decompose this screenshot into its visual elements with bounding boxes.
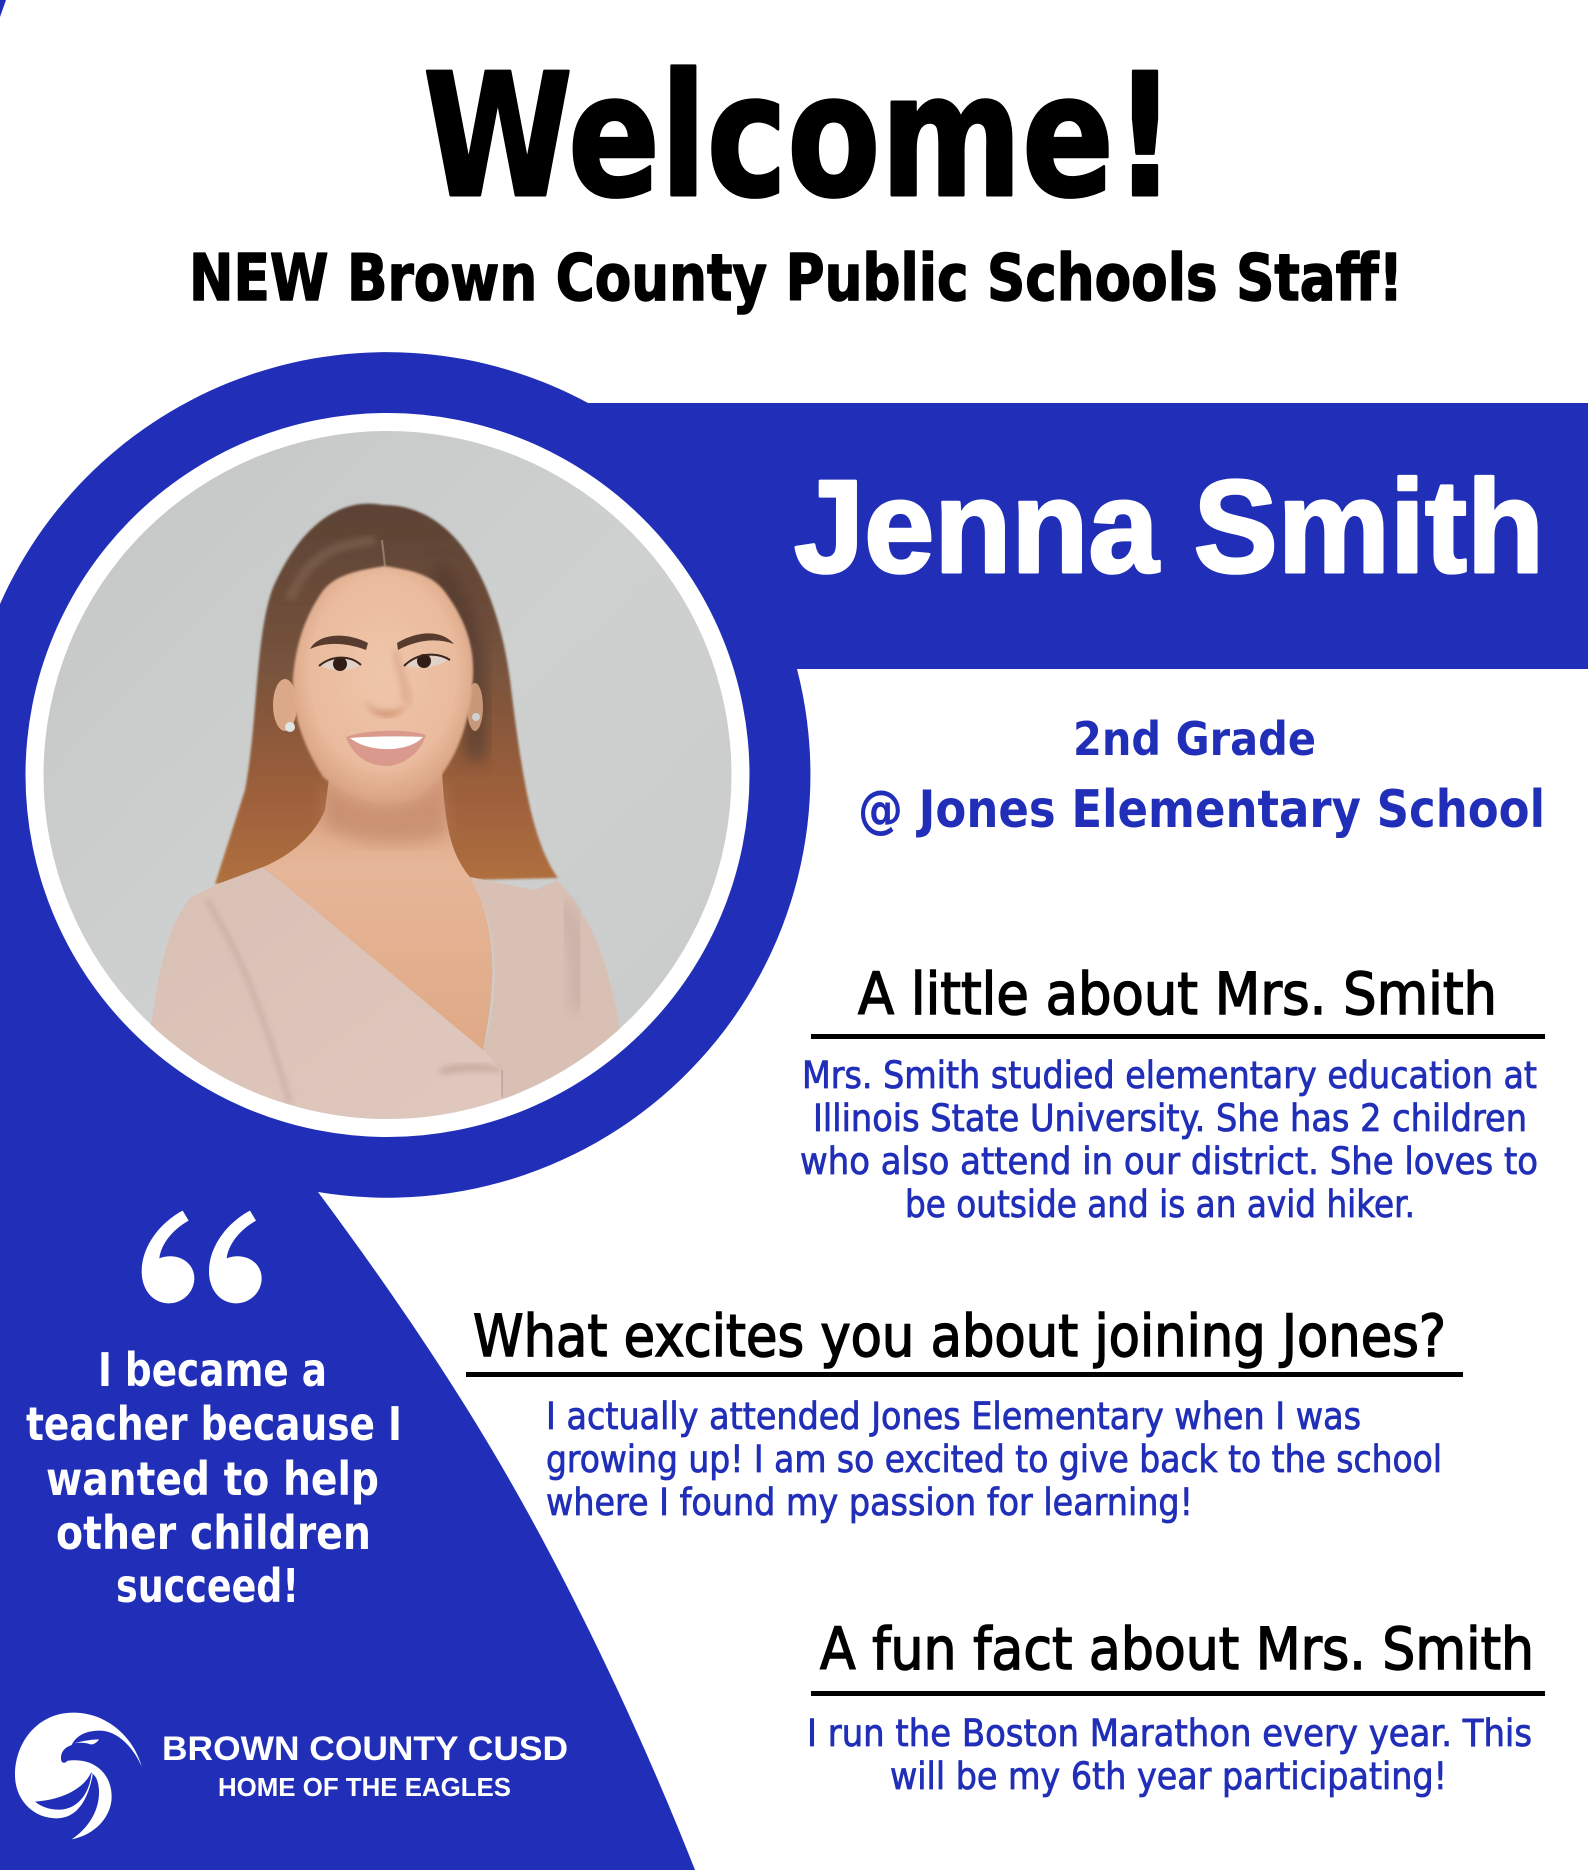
fun fact text: will be my 6th year participating! [890, 1755, 1447, 1798]
ears and earrings [273, 679, 297, 731]
photo [40, 430, 740, 1130]
about divider [811, 1034, 1545, 1039]
portrait photo [26, 413, 750, 1137]
blouse folds [207, 900, 290, 1103]
fun fact text [807, 1712, 1532, 1798]
quote text: other children [56, 1506, 371, 1560]
eyes [321, 659, 360, 670]
logo text: BROWN COUNTY CUSD [162, 1730, 568, 1768]
quote text: succeed! [116, 1559, 299, 1613]
hair parting [382, 540, 385, 566]
name banner text: Jenna Smith [794, 453, 1544, 600]
nose shadow [366, 704, 406, 719]
title: Welcome! [423, 38, 1176, 236]
excites text [546, 1395, 1442, 1524]
neck and chest [263, 770, 492, 1050]
section: excites [466, 1302, 1463, 1524]
excites heading: What excites you about joining Jones? [473, 1302, 1446, 1370]
quote text: wanted to help [46, 1452, 379, 1506]
section: fun fact [807, 1615, 1545, 1798]
hair [215, 504, 558, 884]
excites text: I actually attended Jones Elementary when I was [546, 1395, 1361, 1438]
blouse [150, 867, 502, 1125]
position line one: 2nd Grade [1073, 712, 1316, 766]
quote text: I became a [98, 1343, 327, 1397]
fun fact divider [811, 1691, 1545, 1696]
section: about [800, 960, 1545, 1226]
about text: be outside and is an avid hiker. [905, 1183, 1415, 1226]
quote text [26, 1343, 402, 1613]
excites divider [466, 1372, 1463, 1377]
fun fact text: I run the Boston Marathon every year. This [807, 1712, 1532, 1755]
white photo ring [26, 413, 750, 1137]
logo text [162, 1730, 568, 1802]
excites text: growing up! I am so excited to give back to the school [546, 1438, 1442, 1481]
face [293, 566, 473, 803]
about text: Illinois State University. She has 2 children [813, 1097, 1527, 1140]
mouth [346, 731, 426, 766]
about heading: A little about Mrs. Smith [858, 960, 1497, 1028]
logo text: HOME OF THE EAGLES [218, 1774, 511, 1802]
icon: eagle logo [15, 1713, 142, 1839]
excites text: where I found my passion for learning! [546, 1481, 1193, 1524]
about text [800, 1054, 1538, 1226]
corner mark [0, 0, 6, 17]
about text: who also attend in our district. She loves to [800, 1140, 1538, 1183]
quote text: teacher because I [26, 1397, 402, 1451]
icon: quotation mark [142, 1211, 262, 1303]
eyebrows [310, 636, 368, 650]
